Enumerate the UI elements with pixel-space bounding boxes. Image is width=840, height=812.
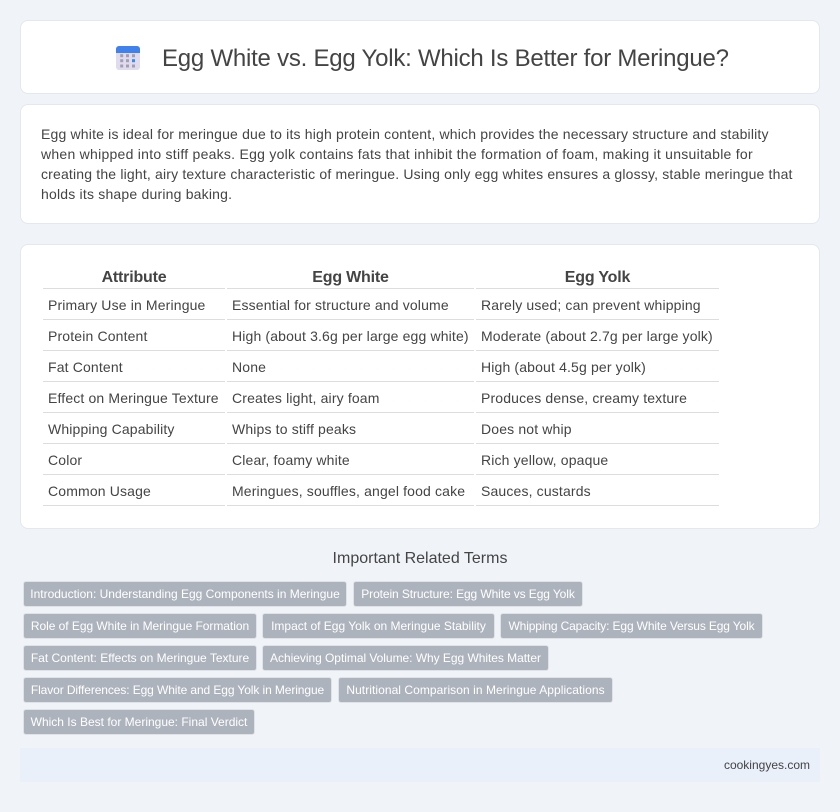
- title: Egg White vs. Egg Yolk: Which Is Better for Meringue?: [162, 45, 729, 72]
- related terms tags: Impact of Egg Yolk on Meringue Stability: [271, 619, 486, 633]
- intro text: when whipped into stiff peaks. Egg yolk contains fats that inhibit the formation of foam, making it unsuitable for: [41, 146, 753, 162]
- intro panel: [20, 104, 820, 224]
- comparison table: Sauces, custards: [481, 483, 591, 499]
- comparison table: Fat Content: [48, 359, 123, 375]
- comparison table: Produces dense, creamy texture: [481, 390, 687, 406]
- related terms tags: Which Is Best for Meringue: Final Verdict: [31, 715, 247, 729]
- comparison table: Whipping Capability: [48, 421, 175, 437]
- comparison table: Clear, foamy white: [232, 452, 350, 468]
- comparison table: High (about 4.5g per yolk): [481, 359, 646, 375]
- comparison table: High (about 3.6g per large egg white): [232, 328, 469, 344]
- comparison table: Effect on Meringue Texture: [48, 390, 219, 406]
- related terms heading: Important Related Terms: [333, 550, 507, 567]
- icon: calendar: [116, 46, 140, 70]
- comparison table: [43, 269, 719, 506]
- related terms tags: Protein Structure: Egg White vs Egg Yolk: [361, 587, 575, 601]
- comparison table: Attribute: [102, 269, 166, 286]
- footer bar: [20, 748, 820, 782]
- intro text: Egg white is ideal for meringue due to its high protein content, which provides the necessary structure and stability: [41, 126, 769, 142]
- footer source: cookingyes.com: [724, 758, 810, 772]
- intro text: [41, 126, 793, 202]
- related terms tags: Whipping Capacity: Egg White Versus Egg Yolk: [508, 619, 754, 633]
- comparison table: Primary Use in Meringue: [48, 297, 206, 313]
- table panel: [20, 244, 820, 529]
- comparison table: Meringues, souffles, angel food cake: [232, 483, 465, 499]
- comparison table: Rarely used; can prevent whipping: [481, 297, 701, 313]
- related terms tags: Introduction: Understanding Egg Components in Meringue: [30, 587, 340, 601]
- comparison table: Essential for structure and volume: [232, 297, 449, 313]
- comparison table: Egg Yolk: [565, 269, 630, 286]
- header panel: [20, 20, 820, 94]
- intro text: creating the light, airy texture characteristic of meringue. Using only egg whites ensures a glossy, stable meringue that: [41, 166, 793, 182]
- related terms tags: Role of Egg White in Meringue Formation: [31, 619, 249, 633]
- related terms tags: Fat Content: Effects on Meringue Texture: [31, 651, 249, 665]
- comparison table: Common Usage: [48, 483, 151, 499]
- comparison table: Egg White: [312, 269, 389, 286]
- comparison table: Protein Content: [48, 328, 148, 344]
- related terms tags: Flavor Differences: Egg White and Egg Yolk in Meringue: [31, 683, 324, 697]
- intro text: holds its shape during baking.: [41, 186, 232, 202]
- comparison table: Creates light, airy foam: [232, 390, 380, 406]
- comparison table: Does not whip: [481, 421, 572, 437]
- comparison table: Rich yellow, opaque: [481, 452, 608, 468]
- comparison table: None: [232, 359, 266, 375]
- related terms tags: Nutritional Comparison in Meringue Applications: [346, 683, 605, 697]
- comparison table: Color: [48, 452, 82, 468]
- related terms tags: [23, 581, 763, 735]
- comparison table: Moderate (about 2.7g per large yolk): [481, 328, 713, 344]
- related terms tags: Achieving Optimal Volume: Why Egg Whites Matter: [270, 651, 541, 665]
- comparison table: Whips to stiff peaks: [232, 421, 356, 437]
